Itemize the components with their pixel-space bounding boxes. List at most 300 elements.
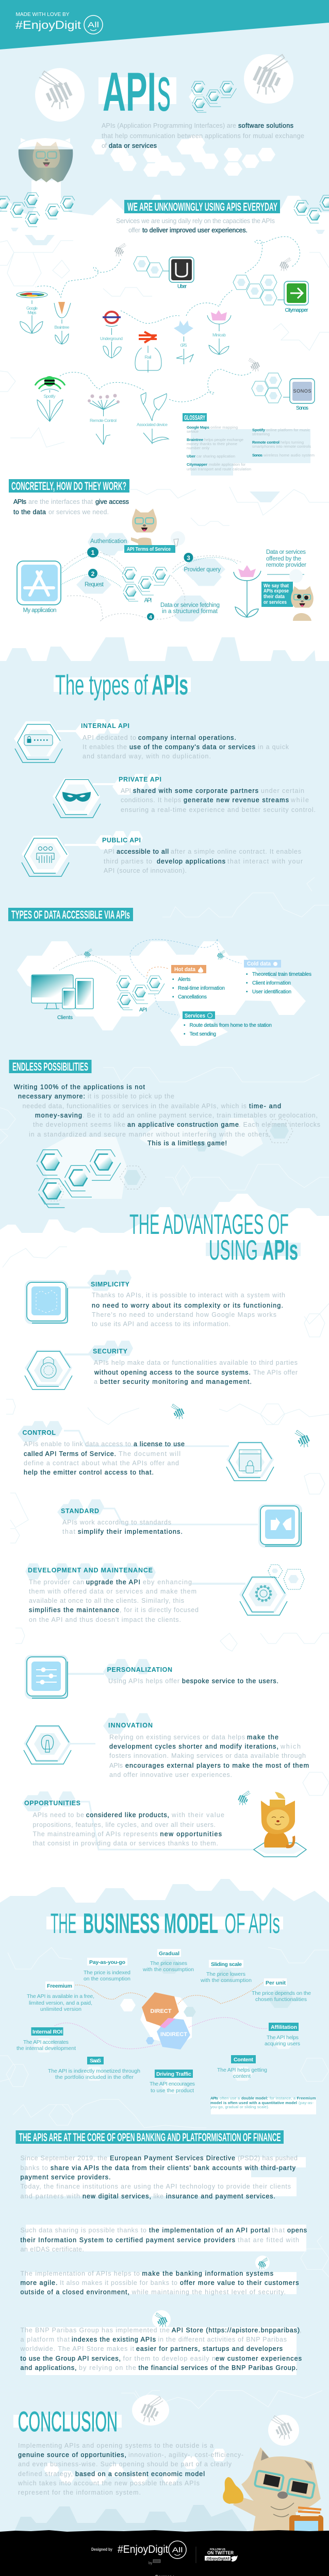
model: gradual bbox=[142, 1949, 194, 1973]
conclusion title: CONCLUSION bbox=[18, 2405, 118, 2437]
glossary entries: smartphones into remote controls bbox=[252, 444, 311, 449]
internal text: use of the company's data or services bbox=[129, 743, 255, 751]
model: pay-as-you-go: Pay-as-you-go bbox=[89, 1959, 125, 1965]
advantage: standard: STANDARD bbox=[61, 1507, 99, 1515]
double model note: you-go, gradual or sliding scale). bbox=[210, 2105, 269, 2109]
section title: business model: THE bbox=[51, 1907, 76, 1939]
intro text: software solutions bbox=[238, 122, 293, 129]
double model note: (pay-as- bbox=[299, 2100, 314, 2105]
glossary entries: mobile application for bbox=[209, 462, 245, 467]
double model note: Freemium bbox=[297, 2096, 316, 2100]
cold data: User identification bbox=[252, 989, 291, 995]
standard text bbox=[62, 1519, 183, 1535]
control text: help the emitter control access to that. bbox=[24, 1469, 154, 1476]
model: gradual: Gradual bbox=[159, 1951, 179, 1957]
clients devices bbox=[31, 975, 93, 1021]
cold data: Cold data bbox=[247, 961, 271, 967]
services: • bbox=[184, 1023, 186, 1028]
flower: Associated device bbox=[137, 393, 169, 444]
app: Sonos: SONOS bbox=[293, 388, 311, 394]
paragraph: API Store bbox=[20, 2327, 302, 2371]
security text: better security monitoring and management. bbox=[100, 1378, 252, 1385]
endless possibilities illustration bbox=[0, 1067, 329, 1208]
data types diagram bbox=[17, 877, 329, 1046]
bee bbox=[238, 1791, 251, 1805]
model: affiliation: acquiring users bbox=[265, 2041, 300, 2047]
simplicity text: Thanks to APIs, it is possible to interact with a system with bbox=[92, 1292, 285, 1299]
double model note: model is often used with a quantitative model bbox=[210, 2100, 297, 2105]
glossary entries: Remote control bbox=[252, 440, 279, 445]
icon: gear bbox=[256, 1586, 271, 1601]
innovation text bbox=[109, 1734, 309, 1778]
development text: eby enhancing bbox=[143, 1579, 192, 1586]
flower: Rail bbox=[135, 332, 161, 372]
glossary entries: Citymapper bbox=[187, 462, 207, 467]
app: Citymapper bbox=[233, 275, 308, 313]
private text: shared with some corporate partners bbox=[133, 787, 258, 794]
model: freemium: Freemium bbox=[47, 1983, 72, 1989]
type: private API bbox=[53, 774, 316, 818]
double model note: for instance, a bbox=[270, 2096, 296, 2100]
public text: accessible to all bbox=[117, 848, 169, 855]
hexagon cluster bottom right bbox=[294, 195, 329, 223]
internal text: in a quick bbox=[258, 743, 289, 751]
glossary entries: Spotify bbox=[252, 428, 266, 432]
paragraph: PSD2: Since September 2019, the bbox=[21, 2155, 107, 2162]
endless possibilities text: . Be it to add an online payment service, train timetables or geolocation, bbox=[83, 1112, 318, 1119]
gold cat on platform bbox=[254, 1792, 306, 1857]
glossary heading: GLOSSARY bbox=[184, 414, 205, 421]
everyday intro text: offer bbox=[128, 227, 140, 234]
glossary entries bbox=[187, 425, 315, 471]
paragraph: agility: It also makes it possible for banks to bbox=[60, 2279, 177, 2286]
innovation text: which bbox=[280, 1743, 301, 1750]
background blobs bbox=[76, 533, 225, 621]
paragraph: PSD2: share via APIs the data from their clients' bank accounts with third-party bbox=[51, 2164, 296, 2172]
step numbers: 1 bbox=[91, 549, 95, 556]
flower: Underground bbox=[100, 312, 123, 358]
development text: available at once to all the clients. Similarly, this bbox=[29, 1597, 184, 1604]
paragraph: API portal: opens bbox=[287, 2227, 307, 2234]
innovation text: encourages external players to make the most of them bbox=[125, 1762, 309, 1769]
provider text: offered by the bbox=[266, 556, 301, 562]
model: internal ROI bbox=[17, 2027, 76, 2052]
hot data: • bbox=[172, 977, 174, 982]
advantage: development and maintenance bbox=[25, 1563, 304, 1623]
paragraph: agility: make the banking information systems bbox=[142, 2270, 273, 2277]
glossary background bbox=[191, 429, 310, 476]
step numbers: 2 bbox=[91, 570, 95, 578]
large cat with honey and jar bbox=[223, 2447, 323, 2536]
flower: GPS: GPS bbox=[180, 343, 187, 348]
heading: endless possibilities bbox=[9, 1060, 92, 1073]
clients devices: Clients bbox=[57, 1015, 73, 1021]
model: SaaS: SaaS bbox=[90, 2058, 101, 2064]
control text: called API Terms of Service. bbox=[24, 1450, 116, 1458]
opportunities text: considered like products, bbox=[86, 1811, 169, 1819]
provider text bbox=[266, 549, 306, 574]
white hex backdrop bbox=[17, 941, 306, 1046]
model: driving traffic: The API encourages bbox=[150, 2081, 195, 2087]
terms of service box and cat: API Terms of Service bbox=[127, 546, 171, 552]
how they work text: APIs bbox=[13, 498, 26, 505]
flower: GPS bbox=[174, 320, 193, 364]
background white hexes bbox=[44, 2449, 227, 2484]
services: Route details from home to the station bbox=[190, 1023, 272, 1028]
glossary entries: helps turning bbox=[281, 440, 304, 445]
paragraph: agility: offer more value to their customers bbox=[180, 2279, 299, 2286]
decorative outlines bbox=[162, 877, 329, 917]
dashed flows bbox=[62, 551, 126, 572]
double model note: APIs bbox=[210, 2096, 218, 2100]
paragraph: PSD2: new digital services, bbox=[83, 2193, 151, 2200]
advantage: personalization: PERSONALIZATION bbox=[107, 1666, 172, 1673]
control text bbox=[24, 1440, 185, 1476]
model: sliding scale: with the consumption bbox=[200, 1977, 252, 1984]
paragraph: API Store: worldwide. The API Store makes it bbox=[20, 2345, 135, 2352]
endless possibilities text: it is possible to pick up the bbox=[88, 1093, 174, 1100]
step numbers bbox=[87, 547, 193, 620]
flower: Braintree bbox=[54, 302, 71, 344]
step numbers: 3 bbox=[187, 554, 190, 562]
public text: API (source of innovation). bbox=[104, 867, 187, 874]
conclusion text: defined strategy, bbox=[18, 2470, 73, 2478]
icon: lock bbox=[41, 1357, 56, 1378]
conclusion text: based on a consistent economic model bbox=[75, 2470, 205, 2478]
API hexagons: API bbox=[144, 598, 152, 604]
innovation text: fosters innovation. Making services or data available through bbox=[109, 1752, 306, 1759]
conclusion bbox=[13, 2395, 323, 2536]
public text: that interact with your bbox=[227, 858, 303, 865]
private text bbox=[121, 787, 316, 814]
direct and indirect hexagons bbox=[142, 1992, 190, 2049]
hex backing bbox=[53, 774, 161, 815]
application icon: My application bbox=[23, 607, 57, 614]
intro text bbox=[102, 122, 304, 149]
security text: a bbox=[94, 1378, 97, 1385]
paragraph: API Store: to use the Group API services, bbox=[21, 2355, 121, 2362]
cold data: Theoretical train timetables bbox=[252, 972, 311, 977]
endless possibilities text: necessary anymore: bbox=[18, 1093, 85, 1100]
API hexagons: API bbox=[139, 1007, 147, 1013]
services: Services bbox=[185, 1013, 205, 1019]
authentication label: Authentication bbox=[90, 538, 127, 545]
endless possibilities text: . Each element interlocks bbox=[239, 1121, 320, 1128]
conclusion text: which takes into account the new possible threats APIs bbox=[18, 2480, 200, 2487]
white section: advantages bbox=[0, 1194, 329, 1903]
flower: Remote Control bbox=[88, 394, 120, 445]
paragraph: PSD2: banks to bbox=[21, 2164, 48, 2172]
model: pay-as-you-go: on the consumption bbox=[84, 1976, 130, 1982]
section title: types of APIs: The types of bbox=[55, 669, 148, 701]
flower: Google Maps: Google bbox=[26, 306, 38, 311]
simplicity text bbox=[92, 1292, 285, 1328]
conclusion text: and even business-wise. Such opening should be part of a clearly bbox=[18, 2461, 232, 2468]
flower: Rail: Rail bbox=[144, 354, 152, 360]
icon: light bulb bbox=[41, 1735, 54, 1752]
model: internal ROI: The API accelerates bbox=[23, 2039, 69, 2045]
standard text: simplify their implementations. bbox=[78, 1528, 183, 1535]
decorative outlines bbox=[0, 1947, 329, 2128]
glossary entries: number only bbox=[187, 446, 209, 450]
icon: dotted shape bbox=[36, 1291, 57, 1313]
personalization text: bespoke service to the users. bbox=[182, 1677, 278, 1685]
model: driving traffic bbox=[150, 2070, 195, 2094]
glossary entries: Sonos bbox=[252, 453, 262, 457]
paragraph: PSD2: European Payment Services Directive bbox=[110, 2155, 235, 2162]
innovation text: Relying on existing services or data helps bbox=[109, 1734, 245, 1741]
advantage: development and maintenance: DEVELOPMENT AND MAINTENANCE bbox=[28, 1567, 153, 1574]
model: per unit bbox=[252, 1978, 311, 2003]
security text bbox=[94, 1359, 298, 1385]
API hexagons bbox=[122, 567, 170, 604]
section title: advantages: USING bbox=[209, 1234, 258, 1266]
how they work text: are the interfaces that bbox=[28, 498, 93, 505]
glossary entries: helps people exchange bbox=[204, 437, 243, 442]
by mark: by bbox=[149, 2562, 153, 2565]
icon: password field bbox=[24, 735, 53, 745]
type: public API: PUBLIC API bbox=[102, 837, 141, 844]
endless possibilities text: This is a limitless game! bbox=[147, 1140, 227, 1147]
app: Sonos: Sonos bbox=[296, 405, 308, 411]
model: internal ROI: Internal ROI bbox=[32, 2029, 62, 2035]
model: per unit: The price depends on the bbox=[252, 1990, 311, 1996]
conclusion text: innovation-, agility-, cost-efficiency- bbox=[128, 2451, 243, 2459]
security text: without opening access to the source systems. bbox=[94, 1369, 251, 1376]
open banking white strips bbox=[26, 2157, 306, 2375]
paragraph: PSD2: Today, the finance institutions are using the API technology to provide their clients bbox=[21, 2183, 291, 2190]
application icon bbox=[17, 561, 61, 614]
glossary heading bbox=[183, 413, 207, 421]
paragraph: PSD2: (PSD2) has pushed bbox=[238, 2155, 298, 2162]
footer bbox=[0, 2530, 329, 2576]
simplicity text: There's no need to understand how Google Maps works bbox=[92, 1311, 276, 1318]
paragraph: API Store: ew customer experiences bbox=[216, 2355, 302, 2362]
model: freemium: limited version, and a paid, bbox=[29, 2000, 92, 2006]
model: freemium: The API is available in a free, bbox=[27, 1993, 94, 1999]
type: internal API bbox=[14, 719, 289, 762]
heading: data types: TYPES OF DATA ACCESSIBLE VIA APIs bbox=[11, 908, 130, 921]
intro text: data or services bbox=[109, 142, 157, 149]
section title: types of APIs: APIs bbox=[152, 669, 188, 701]
paragraph: API Store: , bbox=[300, 2327, 301, 2334]
designed by: Designed by bbox=[91, 2547, 112, 2552]
development text: upgrade the API bbox=[86, 1579, 140, 1586]
hex backing bbox=[22, 831, 143, 873]
how they work text: to the data bbox=[13, 509, 46, 516]
data fetching label bbox=[160, 602, 220, 615]
model: freemium bbox=[27, 1981, 94, 2012]
title: API bbox=[103, 61, 156, 123]
how they work text: give access bbox=[95, 498, 129, 505]
intro text: of bbox=[102, 142, 107, 149]
decorative outlines bbox=[3, 1247, 329, 1795]
endless possibilities text: in a standardized and secure manner without interfering with the others. bbox=[29, 1131, 271, 1138]
double model note bbox=[210, 2096, 316, 2109]
cold data: • bbox=[246, 980, 248, 986]
advantage: personalization bbox=[25, 1655, 278, 1699]
paragraph: API Store: in the different activities of BNP Paribas bbox=[158, 2336, 287, 2343]
model: pay-as-you-go: The price is indexed bbox=[84, 1970, 130, 1976]
development text: on the API and thus doesn't impact the clients. bbox=[29, 1616, 181, 1623]
glossary entries: online mapping bbox=[210, 425, 238, 430]
cold data bbox=[244, 960, 311, 995]
everyday intro text bbox=[116, 217, 275, 234]
paragraph: API portal: their Information System to certified payment service providers bbox=[21, 2236, 235, 2244]
advantage: opportunities: OPPORTUNITIES bbox=[24, 1800, 80, 1807]
endless possibilities text: needed data, functionalities or services in the available APIs, which is bbox=[23, 1103, 246, 1110]
everyday intro text: to deliver improved user experiences. bbox=[142, 227, 248, 234]
glossary entries: streaming bbox=[252, 432, 270, 436]
security text: APIs help make data or functionalities available to third parties bbox=[94, 1359, 298, 1366]
public text: after a simple online contract. It enables bbox=[171, 848, 301, 855]
bee circles bbox=[132, 2395, 299, 2446]
conclusion title bbox=[13, 2405, 122, 2437]
advantage: innovation: INNOVATION bbox=[108, 1722, 153, 1729]
decorative outlines near conclusion bbox=[121, 2236, 329, 2409]
paragraph: API portal: that are fitted with bbox=[238, 2236, 299, 2244]
development text: , for it is directly focused bbox=[120, 1606, 199, 1614]
conclusion text: Implementing APIs and opening systems to the outside is a bbox=[18, 2442, 213, 2449]
callout with cat: their data bbox=[264, 594, 285, 600]
paragraph: PSD2: payment service providers. bbox=[21, 2174, 110, 2181]
endless possibilities text: Writing 100% of the applications is not bbox=[14, 1083, 145, 1091]
how they work text: or services we need. bbox=[48, 509, 109, 516]
provider query label: Provider query bbox=[184, 567, 221, 573]
twitter badge: @EnjoyDigitAll bbox=[206, 2557, 229, 2561]
section title: advantages bbox=[129, 1208, 301, 1266]
hex mound bbox=[14, 2505, 248, 2531]
endless possibilities text: an applicative construction game bbox=[127, 1121, 239, 1128]
data fetching label: in a structured format bbox=[162, 608, 218, 615]
public text: develop applications bbox=[157, 858, 225, 865]
flower: Braintree: Braintree bbox=[55, 325, 70, 330]
model: driving traffic: Driving Traffic bbox=[156, 2071, 191, 2077]
advantage: security bbox=[25, 1341, 298, 1389]
model: driving traffic: to use the product bbox=[151, 2088, 194, 2094]
model: affiliation bbox=[265, 2023, 300, 2047]
glossary bbox=[183, 413, 315, 476]
cold data: • bbox=[246, 972, 248, 977]
glossary entries: money thanks to their phone bbox=[187, 442, 237, 446]
glossary entries: wireless home audio system bbox=[263, 453, 315, 457]
internal text bbox=[83, 734, 289, 760]
opportunities text: that consist in providing data or services thanks to them. bbox=[33, 1840, 218, 1847]
development text: The provider can bbox=[29, 1579, 84, 1586]
opportunities text: The mainstreaming of APIs represents bbox=[33, 1831, 158, 1838]
callout with cat: or services bbox=[264, 599, 287, 605]
process diagram bbox=[17, 509, 314, 621]
endless possibilities text: time- and bbox=[249, 1103, 281, 1110]
private text: generate new revenue streams bbox=[184, 796, 289, 804]
paragraph: API portal: that bbox=[272, 2227, 285, 2234]
private text: ensuring a real-time experience and better security control. bbox=[121, 806, 316, 814]
opportunities text: with their value bbox=[171, 1811, 224, 1819]
model: content: content bbox=[233, 2073, 251, 2079]
flower: Underground: Underground bbox=[100, 336, 123, 341]
model: SaaS bbox=[48, 2057, 140, 2080]
private text: under certain bbox=[261, 787, 304, 794]
hot data: Cancellations bbox=[178, 994, 207, 1000]
type: private API: PRIVATE API bbox=[119, 776, 161, 783]
glossary entries: Uber bbox=[187, 454, 195, 459]
intro text: APIs (Application Programming Interfaces) are bbox=[102, 122, 236, 129]
icon: mask bbox=[62, 792, 91, 802]
paragraph: API portal: Such data sharing is possible thanks to bbox=[21, 2227, 146, 2234]
model: SaaS: the portfolio included in the offer bbox=[55, 2074, 134, 2080]
opportunities text bbox=[33, 1811, 224, 1847]
model: gradual: with the consumption bbox=[142, 1967, 194, 1973]
title bbox=[98, 54, 176, 124]
API hexagons bbox=[117, 976, 164, 1013]
advantage: simplicity bbox=[25, 1270, 285, 1328]
hex backing bbox=[14, 719, 122, 756]
hexagon cluster bottom left bbox=[0, 193, 75, 227]
flower: Google Maps: Maps bbox=[28, 310, 36, 315]
paragraph: API Store: a platform that bbox=[21, 2336, 70, 2343]
twitter badge: ON TWITTER bbox=[207, 2550, 234, 2555]
flower: Minicab bbox=[207, 310, 231, 354]
paragraph: PSD2: and partners with bbox=[21, 2193, 80, 2200]
control text: a license to use bbox=[134, 1440, 185, 1448]
paragraph: API Store: The BNP Paribas Group has implemented the bbox=[21, 2327, 170, 2334]
paragraph: API Store: indexes the existing APIs bbox=[72, 2336, 156, 2343]
decorative outlines bbox=[129, 487, 329, 526]
advantage: standard bbox=[57, 1499, 302, 1548]
flower: Associated device: Associated device bbox=[137, 422, 168, 427]
opportunities text: APIs need to be bbox=[33, 1811, 84, 1819]
opportunities text: propositions, features, life cycles, and over all their users. bbox=[33, 1821, 216, 1828]
innovation text: APIs bbox=[109, 1762, 123, 1769]
brand logo bbox=[118, 2541, 186, 2558]
public text bbox=[104, 848, 303, 874]
hexagon cluster bbox=[191, 81, 236, 112]
data fetching label: Data or service fetching bbox=[160, 602, 220, 608]
control text: The document will bbox=[119, 1450, 180, 1458]
internal text: API dedicated to bbox=[83, 734, 136, 741]
personalization text bbox=[108, 1677, 278, 1685]
paragraph: API Store: for them to develop easily n bbox=[123, 2355, 216, 2362]
how they work text bbox=[13, 498, 129, 516]
private text: API bbox=[121, 787, 131, 794]
hot data: • bbox=[172, 994, 174, 1000]
hot data: Real-time information bbox=[178, 986, 225, 991]
development text: them with offered data or services and make them bbox=[29, 1588, 196, 1595]
model: per unit: chosen functionalities bbox=[255, 1996, 307, 2003]
bees bbox=[171, 1404, 310, 1447]
hot data: Alerts bbox=[178, 977, 191, 982]
glossary entries: urban transport and route calculation bbox=[187, 467, 251, 471]
standard text: that bbox=[62, 1528, 76, 1535]
glossary entries: car sharing application bbox=[196, 454, 235, 459]
step numbers: 4 bbox=[149, 615, 152, 620]
decorative pattern and chunks bbox=[0, 228, 329, 447]
provider flower bbox=[234, 565, 261, 617]
paragraph: PSD2: insurance and payment services. bbox=[166, 2193, 275, 2200]
twitter badge: FOLLOW US bbox=[210, 2548, 226, 2551]
cat in cup bbox=[18, 138, 73, 197]
private text: conditions. It helps bbox=[121, 796, 181, 804]
paragraph: API Store: the financial services of the BNP Paribas Group. bbox=[138, 2364, 298, 2371]
white section: everyday usage and how it works bbox=[0, 195, 329, 661]
flower: Google Maps bbox=[17, 292, 47, 333]
heading: endless possibilities: ENDLESS POSSIBILITIES bbox=[12, 1060, 88, 1073]
paragraph: API Store: and applications, bbox=[21, 2364, 76, 2371]
model: pay-as-you-go bbox=[84, 1958, 130, 1982]
paragraph: API portal: the implementation of an API portal bbox=[149, 2227, 270, 2234]
advantage: simplicity: SIMPLICITY bbox=[91, 1281, 130, 1288]
glossary entries: Braintree bbox=[187, 437, 203, 442]
